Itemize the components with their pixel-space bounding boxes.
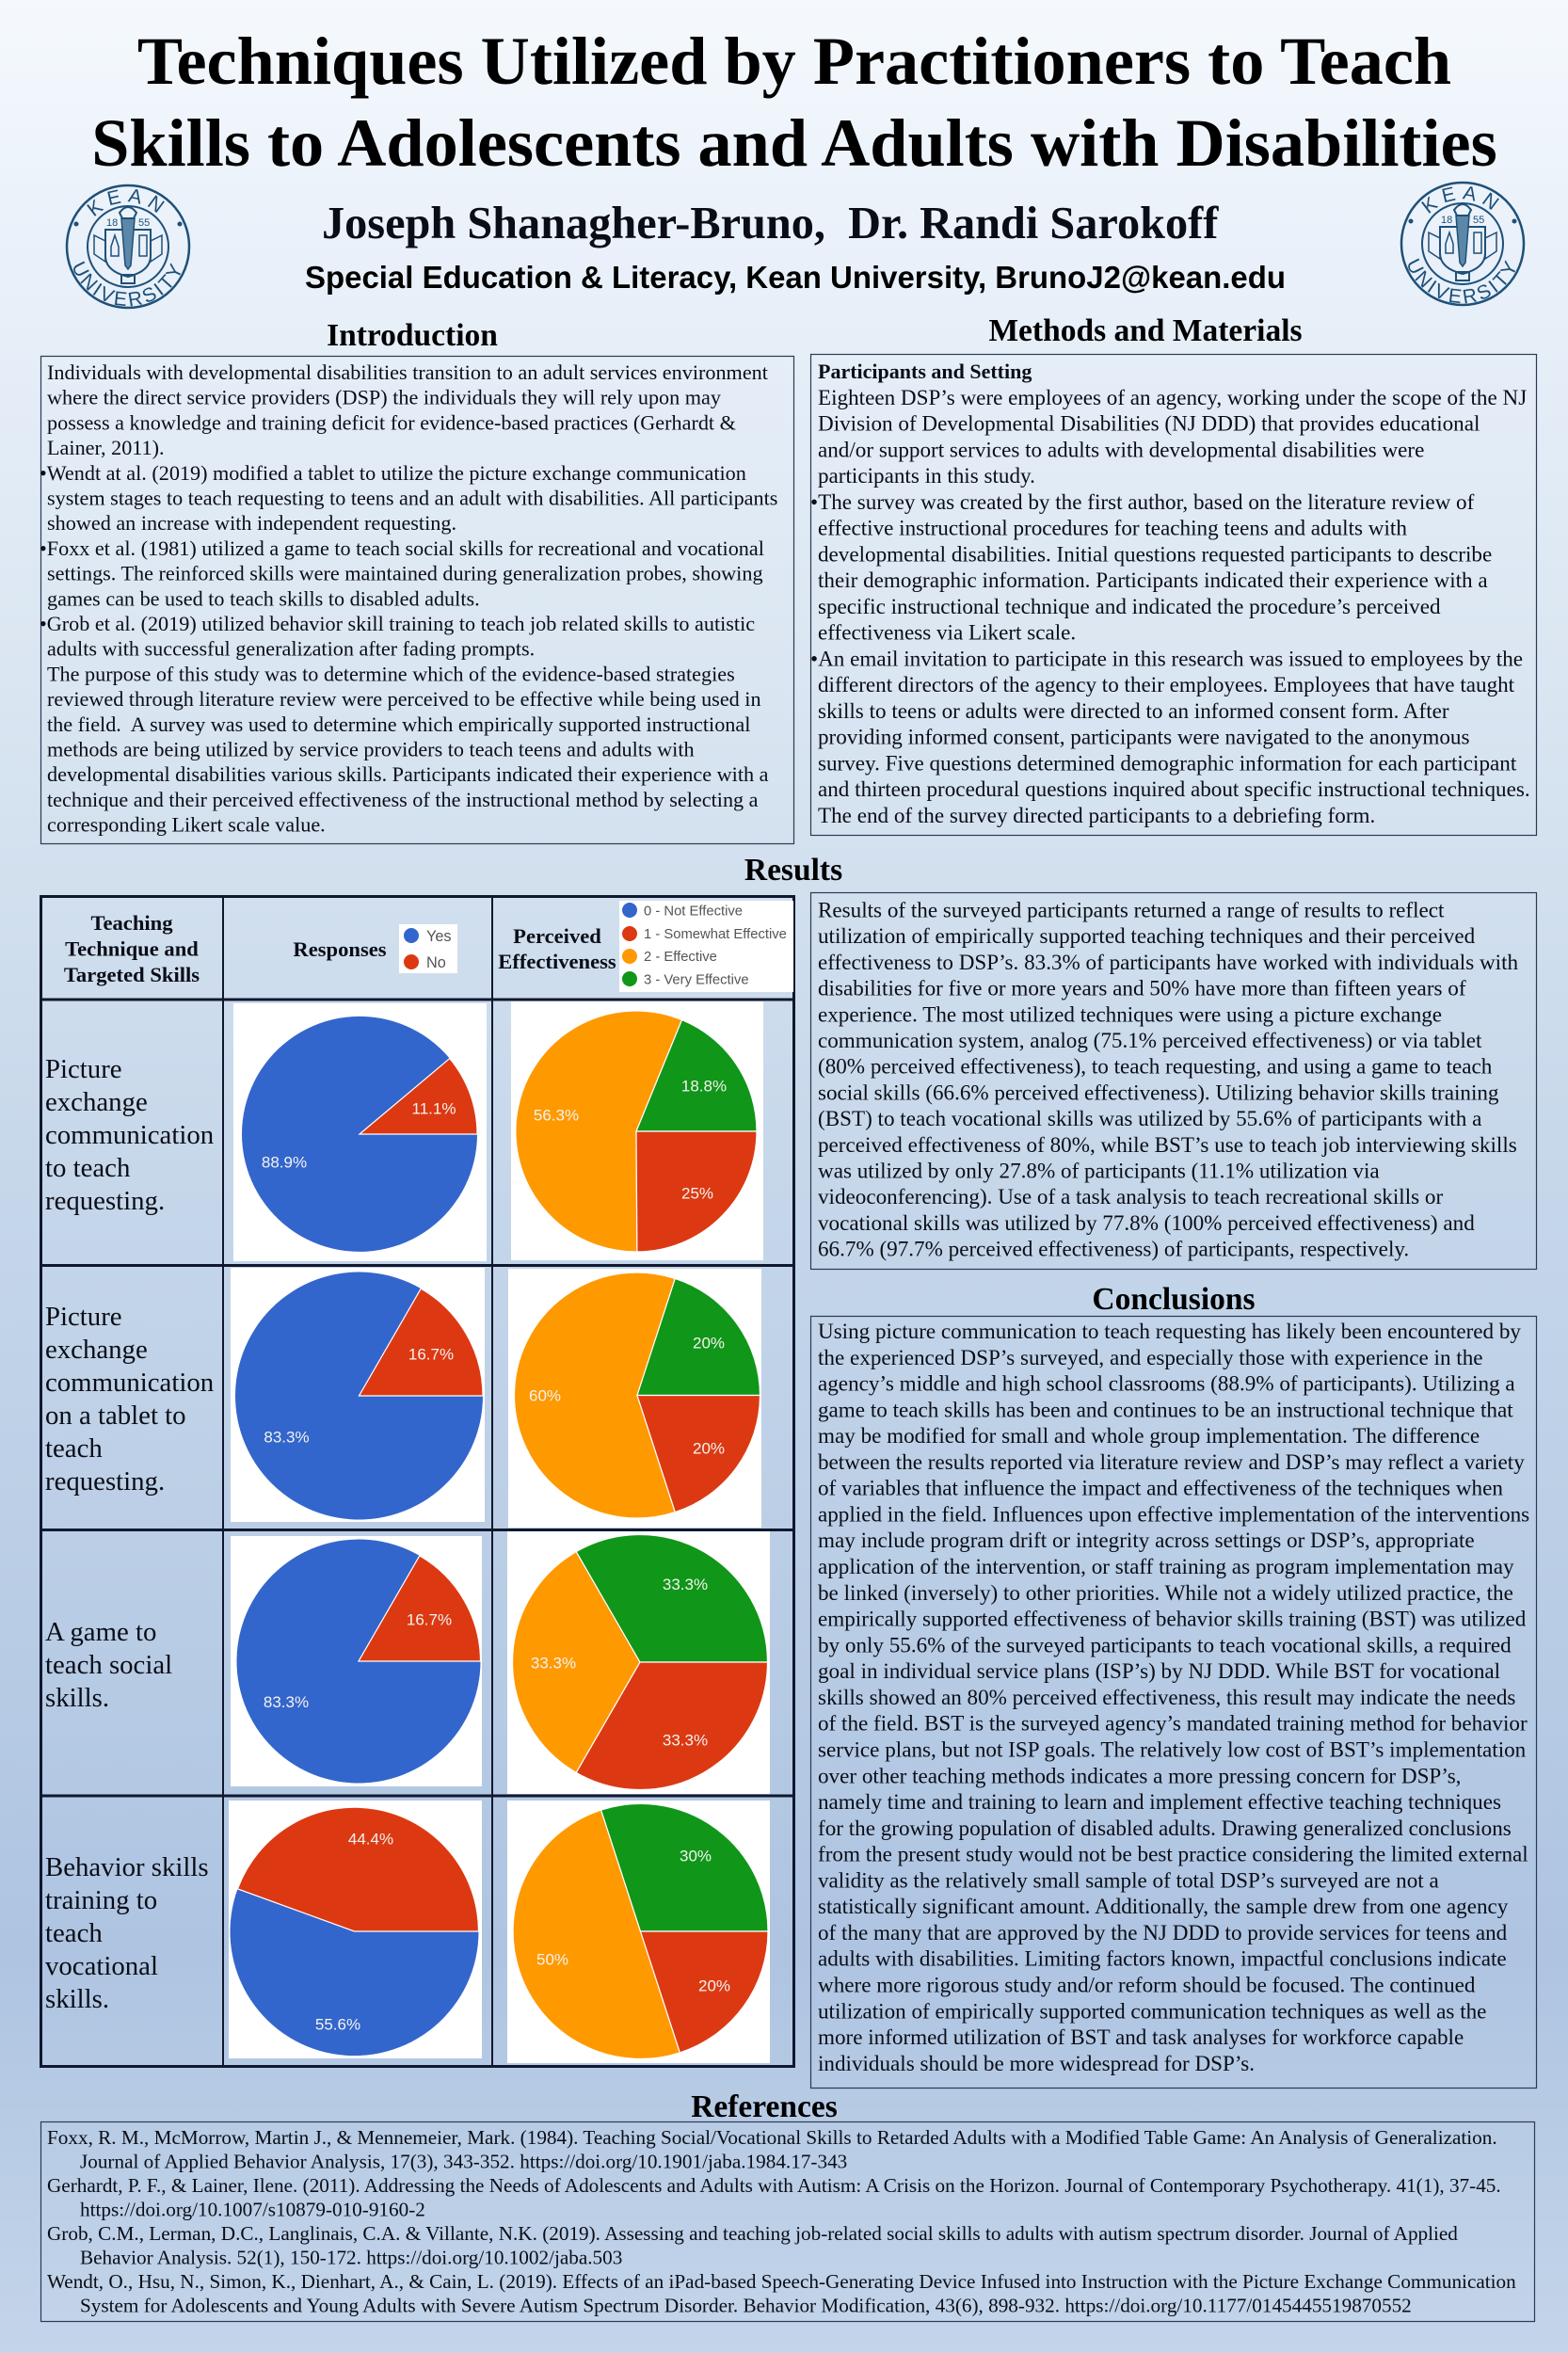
pie: row 2 effectiveness: 20%: [693, 1335, 725, 1352]
panel: Methods and Materials: and thirteen procedural questions inquired about specific instructional techniques.: [818, 777, 1530, 802]
table header: responses: Responses: [293, 937, 387, 961]
panel: Conclusions: over other teaching methods indicates a more pressing concern for DSP’s,: [818, 1764, 1461, 1788]
panel: References: System for Adolescents and Young Adults with Severe Autism Spectrum Disorder. Behavior Modification, 43(6), 898-932. https://doi.org/10.1177/0145445519870552: [80, 2295, 1412, 2317]
panel: Introduction: •Grob et al. (2019) utilized behavior skill training to teach job related skills to autistic: [40, 612, 755, 635]
pie: row 3 effectiveness: [507, 1531, 770, 1794]
table header: perceived effectiveness: Perceived: [513, 924, 601, 948]
row 2 label: communication: [45, 1368, 214, 1398]
panel: References: Foxx, R. M., McMorrow, Martin J., & Mennemeier, Mark. (1984). Teaching Social/Vocational Skills to Retarded Adults with a Modified Table Game: An Analysis of Generalization.: [47, 2126, 1497, 2149]
row 4 label: teach: [45, 1918, 103, 1948]
panel: Conclusions: Using picture communication to teach requesting has likely been encountered by: [818, 1320, 1521, 1344]
pie: row 3 effectiveness: 33.3%: [663, 1576, 708, 1593]
panel: Methods and Materials: effective instructional procedures for teaching teens and adults with: [818, 516, 1407, 540]
panel: Conclusions: utilization of empirically supported communication techniques as well as the: [818, 1999, 1486, 2024]
title: Skills to Adolescents and Adults with Disabilities: [91, 105, 1497, 181]
panel: References: [41, 2121, 1534, 2321]
legend: responses: No: [426, 954, 446, 971]
row 1 label: Picture: [45, 1054, 122, 1084]
panel: Methods and Materials: Eighteen DSP’s were employees of an agency, working under the scope of the NJ: [818, 386, 1527, 410]
panel: Conclusions: of the many that are approved by the NJ DDD to provide services for teens and: [818, 1921, 1508, 1945]
table header: technique: Technique and: [65, 937, 199, 960]
panel: References: Grob, C.M., Lerman, D.C., Langlinais, C.A. & Villante, N.K. (2019). Assessing and teaching job-related social skills to adults with autism spectrum disorder. Journal of Applied: [47, 2222, 1458, 2245]
row 1 label: exchange: [45, 1087, 148, 1117]
panel: Methods and Materials: their demographic information. Participants indicated their experience with a: [818, 568, 1488, 593]
heading: Methods and Materials: Methods and Materials: [988, 313, 1303, 348]
heading: References: References: [691, 2089, 838, 2124]
panel: Conclusions: from the present study would not be best practice considering the limited external: [818, 1843, 1528, 1867]
icon: Kean University seal right: 18: [1441, 215, 1452, 226]
pie: row 2 effectiveness: 60%: [529, 1387, 561, 1404]
panel: Results text: was utilized by only 27.8% of participants (11.1% utilization via: [818, 1160, 1380, 1184]
panel: Results text: (BST) to teach vocational skills was utilized by 55.6% of participants with a: [818, 1107, 1481, 1131]
panel: Introduction: The purpose of this study was to determine which of the evidence-based strategies: [47, 662, 735, 685]
panel: Methods and Materials: The end of the survey directed participants to a debriefing form.: [818, 804, 1375, 828]
panel: Introduction: •Wendt at al. (2019) modified a tablet to utilize the picture exchange communication: [40, 461, 746, 485]
authors: Joseph Shanagher-Bruno, Dr. Randi Sarokoff: [322, 199, 1219, 248]
panel: Introduction: system stages to teach requesting to teens and an adult with disabilities. All participants: [47, 486, 777, 510]
heading: Conclusions: Conclusions: [1092, 1282, 1256, 1317]
panel: References: Wendt, O., Hsu, N., Simon, K., Dienhart, A., & Cain, L. (2019). Effects of an iPad-based Speech-Generating Device Infused into Instruction with the Picture Exchange Communication: [47, 2270, 1516, 2293]
panel: Conclusions: game to teach skills has been and continues to be an instructional technique that: [818, 1398, 1513, 1422]
panel: Conclusions: agency’s middle and high school classrooms (88.9% of participants). Utilizing a: [818, 1372, 1515, 1397]
panel: Conclusions: more informed utilization of BST and task analyses for workforce capable: [818, 2025, 1464, 2050]
panel: Introduction: games can be used to teach skills to disabled adults.: [47, 586, 480, 610]
icon: Kean University seal left: KEAN: [87, 189, 165, 216]
panel: References: Gerhardt, P. F., & Lainer, Ilene. (2011). Addressing the Needs of Adolescents and Adults with Autism: A Crisis on the Horizon. Journal of Contemporary Psychotherapy. 41(1), 37-45.: [47, 2174, 1501, 2197]
row 1 label: to teach: [45, 1153, 131, 1183]
panel: Results text: utilization of empirically supported teaching techniques and their perceived: [818, 924, 1476, 949]
panel: Conclusions: the experienced DSP’s surveyed, and especially those with experience in the: [818, 1346, 1483, 1370]
panel: Introduction: where the direct service providers (DSP) the individuals they will rely upon may: [47, 386, 721, 409]
panel: Conclusions: namely time and training to learn and implement effective teaching techniques: [818, 1790, 1501, 1815]
pie: row 1 effectiveness: [511, 1001, 763, 1260]
panel: Conclusions: where more rigorous study and/or reform should be focused. The continued: [818, 1974, 1476, 1998]
pie: row 1 responses: 88.9%: [262, 1154, 307, 1171]
row 2 label: Picture: [45, 1302, 122, 1332]
panel: Introduction: Lainer, 2011).: [47, 436, 165, 459]
row 1 label: requesting.: [45, 1186, 165, 1216]
pie: row 1 effectiveness: 56.3%: [534, 1107, 579, 1124]
title: Techniques Utilized by Practitioners to Teach: [137, 24, 1451, 99]
panel: Results text: 66.7% (97.7% perceived effectiveness) of participants, respectively.: [818, 1238, 1409, 1262]
panel: Conclusions: adults with disabilities. Limiting factors known, impactful conclusions indicate: [818, 1947, 1507, 1972]
pie: row 3 effectiveness: 33.3%: [531, 1655, 576, 1672]
panel: Methods and Materials: different directors of the agency to their employees. Employees that have taught: [818, 673, 1515, 697]
heading: Results: Results: [744, 853, 842, 888]
pie: row 4 responses: 44.4%: [348, 1830, 393, 1849]
panel: Methods and Materials: Participants and Setting: [818, 360, 1032, 383]
pie: row 2 responses: 83.3%: [264, 1429, 310, 1446]
panel: Results text: [811, 892, 1536, 1269]
panel: References: https://doi.org/10.1007/s10879-010-9160-2: [80, 2199, 425, 2221]
panel: Conclusions: by only 55.6% of the surveyed participants to teach vocational skills, a required: [818, 1633, 1512, 1657]
icon: Kean University seal right: KEAN: [1421, 186, 1499, 214]
panel: Conclusions: applied in the field. Influences upon effective implementation of the interventions: [818, 1502, 1529, 1527]
row 3 label: skills.: [45, 1683, 109, 1713]
panel: Conclusions: empirically supported effectiveness of behavior skills training (BST) was utilized: [818, 1608, 1527, 1632]
panel: Results text: vocational skills was utilized by 77.8% (100% perceived effectiveness) and: [818, 1211, 1475, 1236]
icon: Kean University seal left: 55: [138, 217, 150, 229]
pie: row 1 responses: [233, 1003, 487, 1261]
pie: row 4 effectiveness: [507, 1801, 770, 2063]
panel: Introduction: corresponding Likert scale value.: [47, 813, 326, 837]
panel: Results text: perceived effectiveness of 80%, while BST’s use to teach job interviewing skills: [818, 1133, 1517, 1158]
panel: Introduction: adults with successful generalization after fading prompts.: [47, 637, 535, 661]
icon: Kean University seal right: 55: [1473, 215, 1484, 226]
panel: Results text: effectiveness to DSP’s. 83.3% of participants have worked with individuals with: [818, 951, 1519, 975]
panel: Introduction: possess a knowledge and training deficit for evidence-based practices (Gerhardt &: [47, 410, 736, 434]
panel: Methods and Materials: •The survey was created by the first author, based on the literature review of: [810, 490, 1475, 515]
panel: Conclusions: may be modified for small and whole group implementation. The difference: [818, 1424, 1480, 1449]
panel: Conclusions: statistically significant amount. Additionally, the sample drew from one agency: [818, 1895, 1509, 1919]
panel: Introduction: technique and their perceived effectiveness of the instructional method by selecting a: [47, 788, 759, 811]
table grid: [40, 896, 794, 2067]
panel: Methods and Materials: •An email invitation to participate in this research was issued to employees by the: [810, 647, 1523, 671]
panel: Results text: videoconferencing). Use of a task analysis to teach recreational skills or: [818, 1185, 1443, 1209]
pie: row 1 effectiveness: 25%: [681, 1184, 713, 1203]
legend: responses: Yes: [426, 928, 452, 945]
pie: row 3 responses: 83.3%: [264, 1693, 309, 1711]
pie: row 2 responses: 16.7%: [408, 1346, 454, 1363]
panel: Results text: social skills (66.6% perceived effectiveness). Utilizing behavior skills training: [818, 1080, 1499, 1105]
pie: row 2 effectiveness: [508, 1269, 761, 1528]
panel: Conclusions: application of the intervention, or staff training as program implementation may: [818, 1555, 1514, 1579]
pie: row 2 effectiveness: 20%: [693, 1440, 725, 1457]
pie: row 3 responses: 16.7%: [407, 1611, 452, 1628]
icon: Kean University seal right: UNIVERSITY: [1408, 258, 1515, 303]
panel: Methods and Materials: and/or support services to adults with developmental disabilities were: [818, 438, 1424, 462]
panel: Conclusions: for the growing population of disabled adults. Drawing generalized conclusions: [818, 1817, 1512, 1841]
legend: effectiveness: 0 - Not Effective: [644, 904, 743, 919]
pie: row 4 effectiveness: 20%: [698, 1977, 730, 1995]
panel: Conclusions: validity as the relatively small sample of total DSP’s surveyed are not a: [818, 1868, 1439, 1893]
row 3 label: A game to: [45, 1617, 156, 1647]
panel: Methods and Materials: specific instructional technique and indicated the procedure’s perceived: [818, 595, 1441, 619]
panel: Results text: experience. The most utilized techniques were using a picture exchange: [818, 1002, 1442, 1027]
row 3 label: teach social: [45, 1650, 172, 1680]
panel: Conclusions: goal in individual service plans (ISP’s) by NJ DDD. While BST for vocational: [818, 1659, 1500, 1684]
panel: Methods and Materials: effectiveness via Likert scale.: [818, 621, 1076, 646]
affiliation: Special Education & Literacy, Kean University, BrunoJ2@kean.edu: [305, 260, 1286, 295]
row 4 label: training to: [45, 1885, 157, 1915]
table header: technique: Teaching: [90, 911, 173, 935]
panel: Introduction: [40, 356, 794, 843]
panel: Conclusions: be linked (inversely) to other priorities. While not a widely utilized practice, the: [818, 1581, 1513, 1606]
panel: Results text: disabilities for five or more years and 50% have more than fifteen years of: [818, 977, 1466, 1001]
panel: Methods and Materials: developmental disabilities. Initial questions requested participants to describe: [818, 542, 1492, 567]
panel: References: Journal of Applied Behavior Analysis, 17(3), 343-352. https://doi.org/10.1901/jaba.1984.17-343: [80, 2150, 847, 2172]
row 1 label: communication: [45, 1120, 214, 1150]
panel: Conclusions: of variables that influence the impact and effectiveness of the techniques when: [818, 1477, 1503, 1501]
panel: Conclusions: between the results reported via literature review and DSP’s may reflect a variety: [818, 1450, 1525, 1475]
legend: effectiveness: 1 - Somewhat Effective: [644, 927, 787, 942]
pie: row 4 responses: [229, 1801, 482, 2058]
panel: Conclusions: [811, 1316, 1536, 2088]
table header: technique: Targeted Skills: [64, 963, 200, 986]
panel: Methods and Materials: skills to teens or adults were directed to an informed consent form. After: [818, 699, 1449, 724]
pie: row 4 responses: 55.6%: [315, 2016, 360, 2033]
icon: Kean University seal left: 18: [106, 217, 118, 229]
panel: Conclusions: service plans, but not ISP goals. The relatively low cost of BST’s implementation: [818, 1737, 1527, 1762]
panel: Results text: Results of the surveyed participants returned a range of results to reflect: [818, 898, 1445, 922]
table header: perceived effectiveness: Effectiveness: [498, 950, 616, 973]
panel: References: Behavior Analysis. 52(1), 150-172. https://doi.org/10.1002/jaba.503: [80, 2246, 622, 2268]
icon: Kean University seal left: UNIVERSITY: [73, 262, 181, 307]
row 2 label: teach: [45, 1433, 103, 1464]
panel: Conclusions: may include program drift or integrity across settings or DSP’s, appropriate: [818, 1529, 1475, 1553]
panel: Methods and Materials: Division of Developmental Disabilities (NJ DDD) that provides educational: [818, 412, 1480, 437]
row 4 label: skills.: [45, 1984, 109, 2014]
panel: Introduction: developmental disabilities various skills. Participants indicated their experience with a: [47, 762, 769, 786]
panel: Introduction: settings. The reinforced skills were maintained during generalization probes, showing: [47, 562, 763, 585]
row 2 label: exchange: [45, 1335, 148, 1365]
panel: Methods and Materials: participants in this study.: [818, 464, 1035, 488]
panel: Conclusions: individuals should be more widespread for DSP’s.: [818, 2052, 1255, 2076]
legend: effectiveness: 3 - Very Effective: [644, 973, 749, 988]
row 2 label: on a tablet to: [45, 1401, 186, 1431]
table header: perceived effectiveness: [498, 924, 616, 973]
legend: effectiveness: [619, 901, 793, 992]
row 4 label: vocational: [45, 1951, 158, 1981]
panel: Introduction: reviewed through literature review were perceived to be effective while being used in: [47, 687, 761, 711]
panel: Methods and Materials: survey. Five questions determined demographic information for each participant: [818, 751, 1517, 776]
panel: Introduction: showed an increase with independent requesting.: [47, 511, 456, 535]
panel: Methods and Materials: [810, 354, 1536, 836]
pie: row 3 responses: [231, 1536, 482, 1786]
panel: Results text: (80% perceived effectiveness), to teach requesting, and using a game to teach: [818, 1055, 1493, 1080]
pie: row 4 effectiveness: 50%: [536, 1950, 568, 1969]
heading: Introduction: Introduction: [327, 318, 498, 353]
panel: Conclusions: skills showed an 80% perceived effectiveness, this result may indicate the needs: [818, 1686, 1515, 1710]
icon: Kean University seal left: [66, 184, 190, 309]
pie: row 1 effectiveness: 18.8%: [681, 1077, 727, 1096]
pie: row 1 responses: 11.1%: [412, 1099, 456, 1118]
pie: row 4 effectiveness: 30%: [680, 1847, 712, 1865]
panel: Introduction: Individuals with developmental disabilities transition to an adult services environment: [47, 360, 769, 384]
panel: Results text: communication system, analog (75.1% perceived effectiveness) or via tablet: [818, 1029, 1482, 1053]
results table: [40, 896, 794, 2067]
panel: Methods and Materials: providing informed consent, participants were navigated to the anonymous: [818, 725, 1469, 749]
panel: Conclusions: of the field. BST is the surveyed agency’s mandated training method for behavior: [818, 1712, 1528, 1737]
panel: Introduction: the field. A survey was used to determine which empirically supported instructional: [47, 712, 750, 736]
title: [91, 24, 1497, 181]
legend: responses: [399, 924, 457, 973]
panel: Introduction: •Foxx et al. (1981) utilized a game to teach social skills for recreational and vocational: [40, 536, 764, 560]
pie: row 3 effectiveness: 33.3%: [663, 1732, 708, 1749]
pie: row 2 responses: [231, 1268, 485, 1522]
table header: technique: [64, 911, 200, 986]
row 4 label: Behavior skills: [45, 1852, 209, 1882]
icon: Kean University seal right: [1400, 181, 1525, 307]
row 2 label: requesting.: [45, 1466, 165, 1497]
legend: effectiveness: 2 - Effective: [644, 950, 717, 965]
panel: Introduction: methods are being utilized by service providers to teach teens and adults with: [47, 738, 695, 761]
